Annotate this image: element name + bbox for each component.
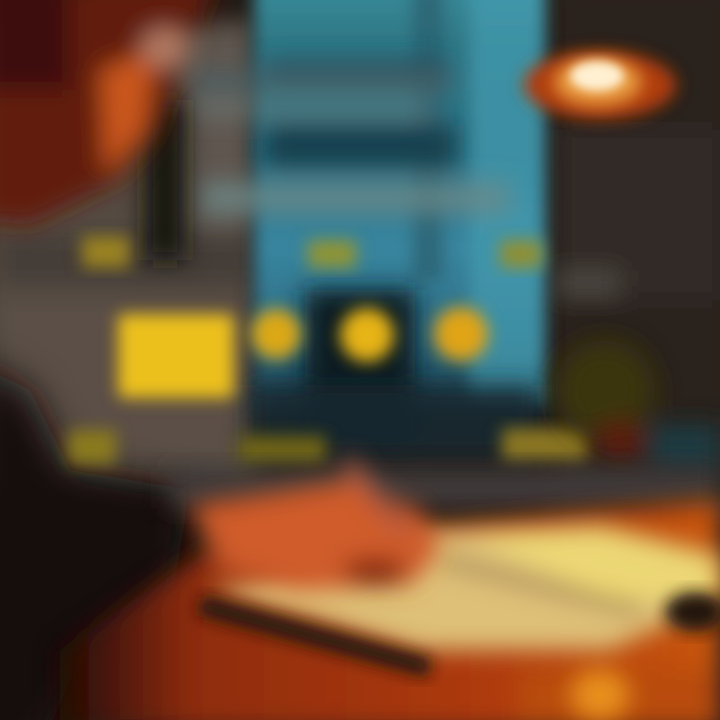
panel: teal window — [254, 0, 546, 410]
panel: orange desk — [60, 500, 720, 720]
icon: yellow circle three — [434, 307, 488, 361]
figure: dark shoulder lower left — [0, 360, 190, 720]
panel: open notebook — [210, 525, 720, 650]
icon: yellow circle two — [340, 308, 394, 362]
panel: grey left wall — [0, 20, 255, 490]
figure: orange person at top left — [0, 0, 220, 225]
heading: blurred title bands — [190, 60, 510, 214]
panel: grey desk edge band — [170, 468, 720, 508]
figure: hand holding pencil — [190, 460, 440, 590]
panel: right dark wall — [552, 0, 720, 520]
icon: small yellow marks, upper row — [82, 236, 542, 268]
icon: hanging lamp — [524, 51, 676, 119]
icon: glow on desk — [570, 669, 630, 720]
figure: dark silhouette in window — [145, 100, 540, 460]
icon: blurred plant — [555, 340, 720, 470]
icon: pen shadow along notebook — [200, 605, 430, 668]
icon: small yellow marks, lower row — [68, 428, 588, 466]
icon: yellow circle one — [251, 309, 301, 359]
icon: dark object on notebook — [665, 592, 720, 632]
callout: yellow rectangle — [118, 314, 234, 398]
